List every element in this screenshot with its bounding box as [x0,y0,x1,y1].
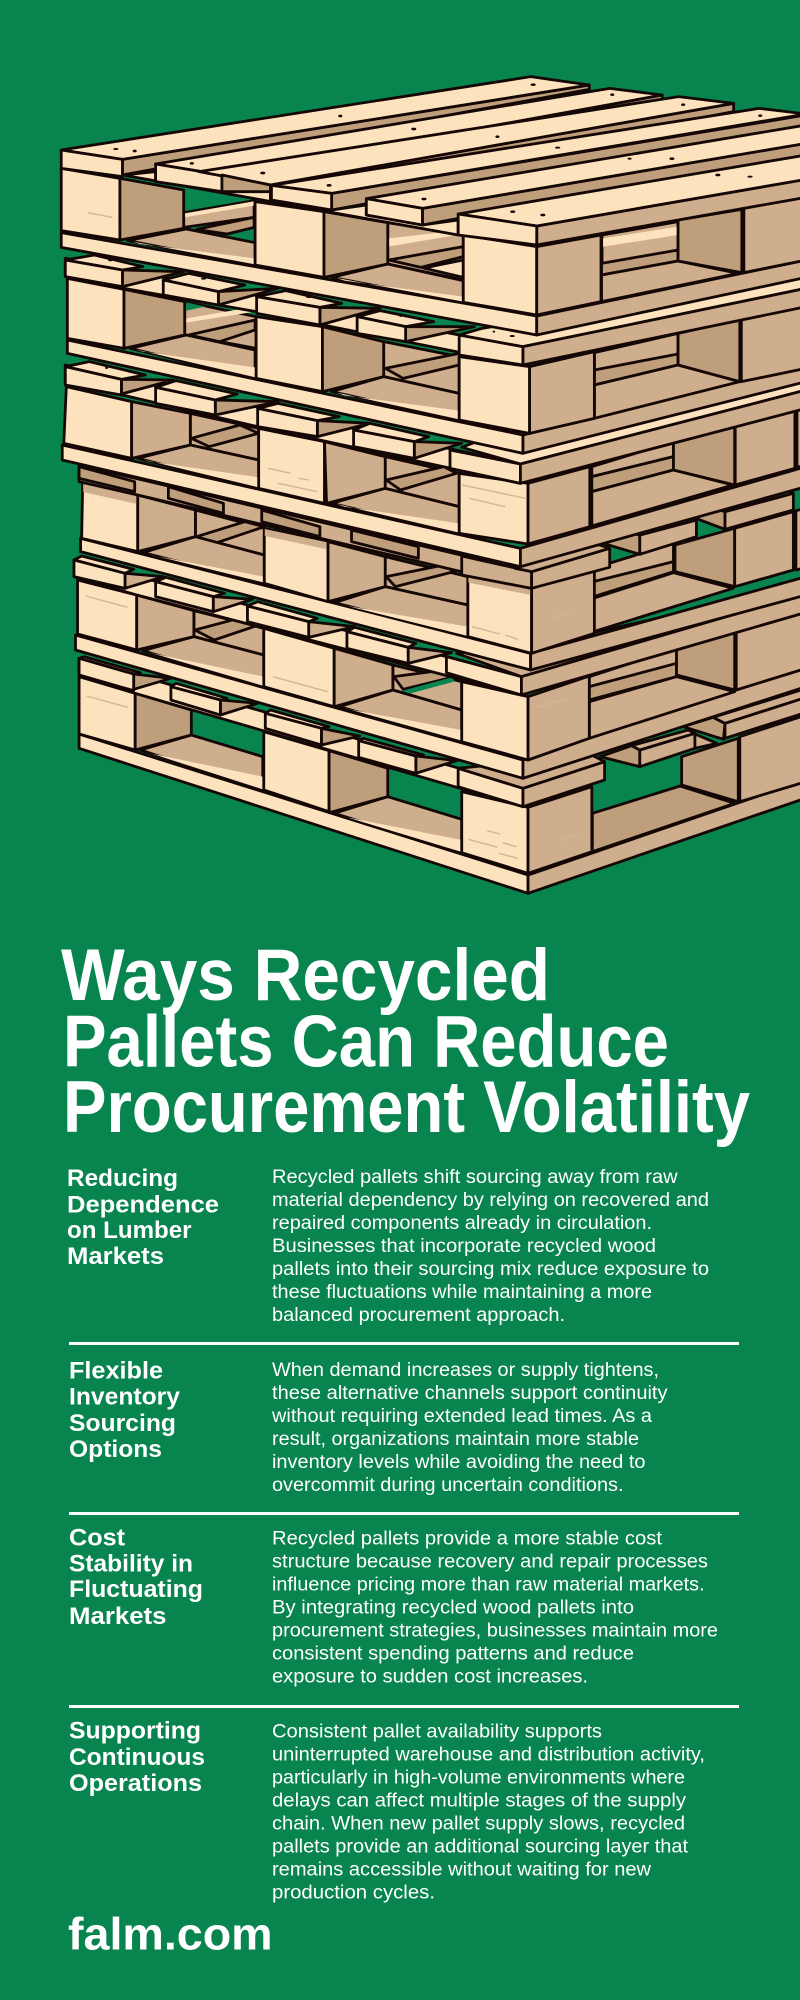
body text: supporting continuous operations: pallets provide an additional sourcing layer that [272,1837,689,1858]
body text: supporting continuous operations: Consistent pallet availability supports [272,1722,602,1743]
pallet 3 [62,362,800,567]
heading: flexible inventory: Options [69,1436,162,1463]
body text: cost stability: Recycled pallets provide a more stable cost [272,1528,663,1550]
body text: reducing dependence: repaired components already in circulation. [272,1213,652,1234]
body text: flexible inventory: these alternative channels support continuity [272,1383,668,1404]
heading: flexible inventory: Inventory [69,1384,180,1410]
website url: falm.com [68,1909,273,1960]
body text: cost stability: structure because recovery and repair processes [272,1552,708,1572]
body text: supporting continuous operations: chain. When new pallet supply slows, recycled [272,1814,685,1835]
section: reducing dependence on lumber markets [67,1165,709,1326]
body text: flexible inventory [271,1360,668,1496]
body text: supporting continuous operations: delays can affect multiple stages of the supply [272,1791,687,1812]
body text: flexible inventory: overcommit during uncertain conditions. [272,1475,624,1496]
body text: reducing dependence: pallets into their sourcing mix reduce exposure to [272,1259,709,1280]
heading: cost stability: Stability in [69,1550,193,1577]
body text: reducing dependence: Recycled pallets shift sourcing away from raw [272,1167,678,1188]
heading: cost stability: Fluctuating [69,1576,203,1603]
heading: supporting continuous operations [69,1718,205,1797]
body text: flexible inventory: without requiring extended lead times. As a [271,1406,652,1427]
pallet 1 (top) [61,77,800,335]
title: Pallets Can Reduce [63,1002,669,1082]
pallet 4 [79,465,800,670]
body text: flexible inventory: When demand increases or supply tightens, [272,1360,659,1381]
illustration: stack of wooden pallets [61,77,800,893]
heading: supporting continuous operations: Supporting [69,1718,201,1745]
pallet 5 [74,556,800,778]
heading: reducing dependence: Reducing [67,1165,178,1192]
heading: flexible inventory: Flexible [69,1358,163,1385]
body text: supporting continuous operations: uninterrupted warehouse and distribution activity, [272,1745,705,1766]
section: flexible inventory sourcing options [69,1358,668,1496]
body text: supporting continuous operations: production cycles. [272,1883,435,1904]
heading: flexible inventory [69,1358,180,1463]
body text: cost stability [272,1528,718,1688]
body text: cost stability: consistent spending patterns and reduce [272,1644,634,1664]
heading: reducing dependence: Markets [67,1243,164,1270]
body text: cost stability: procurement strategies, businesses maintain more [272,1620,718,1642]
body text: reducing dependence [272,1167,709,1326]
title: Ways Recycled [61,935,550,1016]
pallet 2 [65,255,800,453]
heading: supporting continuous operations: Continuous [69,1744,205,1771]
pallet 6 (bottom) [79,657,800,893]
heading: supporting continuous operations: Operations [69,1770,202,1797]
body text: reducing dependence: these fluctuations while maintaining a more [272,1282,652,1303]
body text: cost stability: influence pricing more than raw material markets. [272,1574,705,1596]
body text: flexible inventory: inventory levels while avoiding the need to [272,1452,646,1473]
heading: reducing dependence: on Lumber [67,1217,192,1244]
section: cost stability in fluctuating markets [69,1524,718,1688]
body text: reducing dependence: material dependency by relying on recovered and [272,1190,709,1211]
body text: cost stability: By integrating recycled wood pallets into [272,1598,634,1618]
body text: cost stability: exposure to sudden cost increases. [272,1666,588,1688]
body text: supporting continuous operations [272,1722,705,1904]
body text: reducing dependence: balanced procurement approach. [272,1305,565,1326]
body text: reducing dependence: Businesses that incorporate recycled wood [272,1236,656,1257]
heading: flexible inventory: Sourcing [69,1410,176,1437]
body text: flexible inventory: result, organizations maintain more stable [272,1429,639,1450]
heading: cost stability: Markets [69,1603,166,1630]
heading: cost stability: Cost [69,1524,125,1552]
heading: reducing dependence [67,1165,219,1270]
heading: cost stability [69,1524,203,1630]
title [61,935,750,1148]
heading: reducing dependence: Dependence [67,1191,219,1218]
body text: supporting continuous operations: particularly in high-volume environments where [272,1768,685,1789]
section: supporting continuous operations [69,1718,705,1904]
body text: supporting continuous operations: remains accessible without waiting for new [272,1860,651,1881]
